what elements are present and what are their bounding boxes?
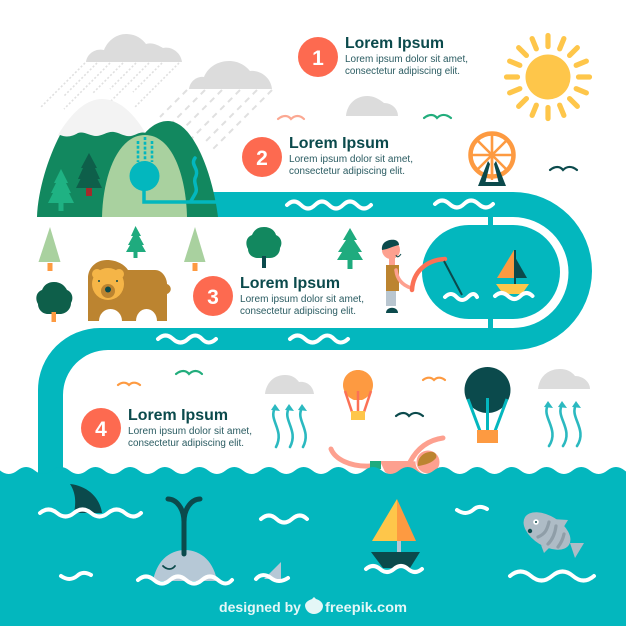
cloud left of balloon [265, 375, 314, 394]
step 2 [242, 135, 413, 177]
fishing line [444, 261, 462, 295]
step 2: consectetur adipiscing elit. [289, 166, 405, 177]
tree: green pine [126, 226, 146, 258]
fish [517, 505, 584, 558]
tree: round green [246, 227, 281, 268]
tree: light triangle 1 [38, 227, 60, 271]
fisherman [382, 240, 462, 313]
orange bird [118, 383, 140, 385]
step 2: Lorem ipsum dolor sit amet, [289, 154, 413, 165]
arm [410, 438, 443, 462]
step 1: Lorem Ipsum [345, 35, 444, 52]
watermark [219, 597, 407, 615]
sea sailboat [366, 499, 422, 572]
sea waves [61, 507, 594, 580]
sun [506, 36, 590, 118]
neck and head [389, 256, 395, 266]
lake waves [445, 294, 477, 300]
step 2: 2 [256, 147, 268, 170]
wavy arrows left [271, 404, 307, 447]
green bird lower [176, 371, 202, 374]
small cloud [346, 96, 398, 116]
step 1 [298, 35, 468, 77]
hair [382, 240, 399, 250]
birds [118, 115, 577, 416]
rain from cloud 1 [40, 63, 179, 109]
tree: light triangle 2 [184, 227, 206, 271]
shark fin [40, 484, 141, 516]
rod [412, 259, 445, 290]
salmon bird [278, 116, 304, 119]
step 4: consectetur adipiscing elit. [128, 438, 244, 449]
dark bird lower [396, 413, 423, 416]
river with lake loop [38, 192, 592, 480]
swimmer [331, 438, 443, 478]
snow cap [58, 99, 146, 150]
head [416, 450, 440, 474]
back leg [331, 449, 370, 466]
step 3: Lorem Ipsum [240, 275, 340, 292]
lake [422, 225, 560, 319]
light pine [48, 169, 74, 211]
lake boat [495, 250, 532, 299]
body [380, 461, 442, 478]
tree: round dark [36, 282, 72, 322]
tree: pine right of round tree [337, 228, 363, 269]
sea [0, 467, 626, 626]
dark bird [550, 167, 577, 170]
light green arch [102, 135, 187, 217]
rain from cloud 2 [160, 90, 272, 150]
whale [138, 499, 232, 584]
cloud 2 [189, 61, 272, 89]
hair [418, 452, 436, 466]
mountains [37, 99, 218, 217]
left mountain [37, 132, 146, 217]
step 3 [193, 275, 364, 317]
step 4: 4 [95, 418, 107, 441]
river waves [158, 200, 493, 342]
step 1: Lorem ipsum dolor sit amet, [345, 54, 468, 65]
lake divider [488, 217, 493, 328]
dark balloon [464, 367, 510, 443]
step 3: consectetur adipiscing elit. [240, 306, 356, 317]
right mountain [140, 121, 218, 217]
bear [88, 260, 171, 321]
wavy arrows right [544, 401, 581, 446]
step 4: Lorem ipsum dolor sit amet, [128, 426, 252, 437]
step 4: Lorem Ipsum [128, 407, 228, 424]
orange balloon [343, 370, 373, 420]
watermark: designed by [219, 599, 301, 615]
step 1: consectetur adipiscing elit. [345, 66, 460, 77]
step 3: Lorem ipsum dolor sit amet, [240, 294, 364, 305]
step 4 [81, 407, 252, 449]
orange bird right [423, 378, 445, 380]
underground drips [138, 137, 152, 162]
step 1: 1 [312, 47, 324, 70]
underground pool and pipe [130, 158, 218, 202]
watermark: freepik.com [325, 599, 407, 615]
step 2: Lorem Ipsum [289, 135, 389, 152]
dark pine [76, 153, 102, 196]
smile [396, 254, 401, 257]
ferris wheel [470, 134, 514, 186]
cloud 1 [86, 34, 182, 62]
swim trunks [370, 461, 381, 469]
legs [386, 291, 396, 306]
shoe [386, 308, 398, 313]
green bird [424, 115, 451, 118]
freepik logo icon [305, 597, 323, 614]
arm [396, 270, 411, 288]
cloud right [538, 369, 590, 389]
small fin [256, 562, 288, 581]
step 3: 3 [207, 286, 219, 309]
torso [386, 265, 399, 291]
